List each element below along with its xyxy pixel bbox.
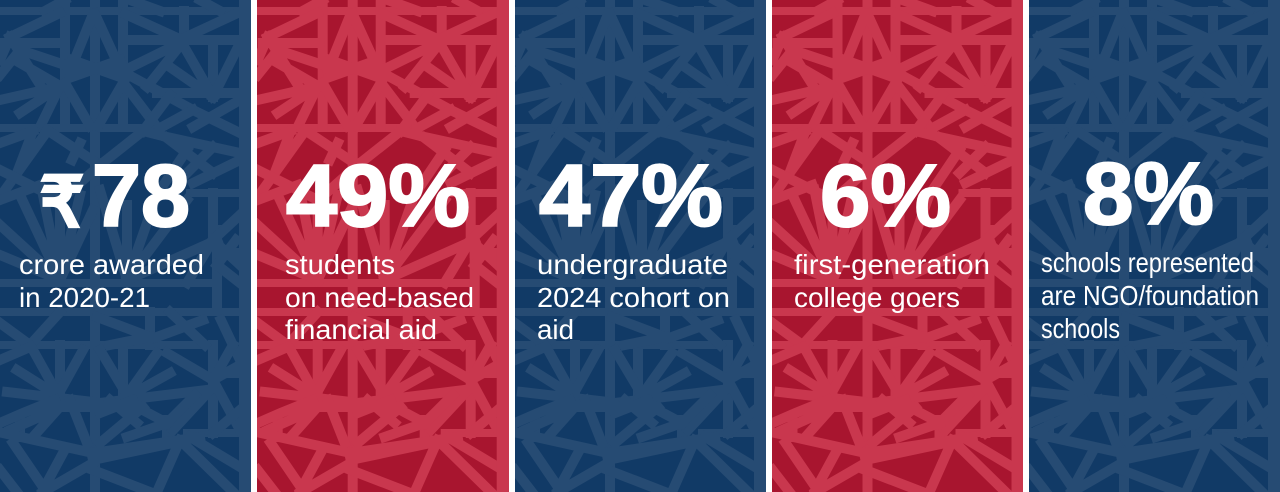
caption: students on need-based financial aid: financial aid — [285, 314, 437, 345]
caption: undergraduate 2024 cohort on aid — [537, 249, 730, 345]
caption: schools represented are NGO/foundation schools — [1041, 247, 1259, 344]
panel: undergraduate cohort — [515, 0, 766, 492]
caption: crore awarded in 2020-21 — [19, 249, 204, 313]
figure: ₹78: ₹ — [40, 164, 84, 241]
caption: students on need-based financial aid — [285, 249, 474, 345]
figure: ₹78: 78 — [92, 146, 190, 245]
panel: need-based aid — [257, 0, 511, 492]
caption: crore awarded in 2020-21: in 2020-21 — [19, 282, 150, 313]
panel: NGO schools — [1029, 0, 1280, 492]
panel: first-generation — [772, 0, 1024, 492]
caption: undergraduate 2024 cohort on aid: undergraduate — [537, 249, 728, 280]
caption: undergraduate 2024 cohort on aid: aid — [537, 314, 574, 345]
caption: students on need-based financial aid: on need-based — [285, 282, 474, 313]
figure: 6%: 6% — [820, 146, 951, 245]
caption: first-generation college goers — [794, 249, 990, 313]
figure: 8%: 8% — [1083, 144, 1214, 243]
caption: first-generation college goers: college goers — [794, 282, 960, 313]
caption: students on need-based financial aid: students — [285, 249, 395, 280]
caption: schools represented are NGO/foundation schools: schools — [1041, 313, 1120, 344]
figure: 49%: 49% — [286, 146, 470, 245]
caption: undergraduate 2024 cohort on aid: 2024 cohort on — [537, 282, 730, 313]
panel: crore awarded — [0, 0, 251, 492]
caption: first-generation college goers: first-generation — [794, 249, 990, 280]
figure: 47%: 47% — [539, 146, 723, 245]
caption: crore awarded in 2020-21: crore awarded — [19, 249, 204, 280]
